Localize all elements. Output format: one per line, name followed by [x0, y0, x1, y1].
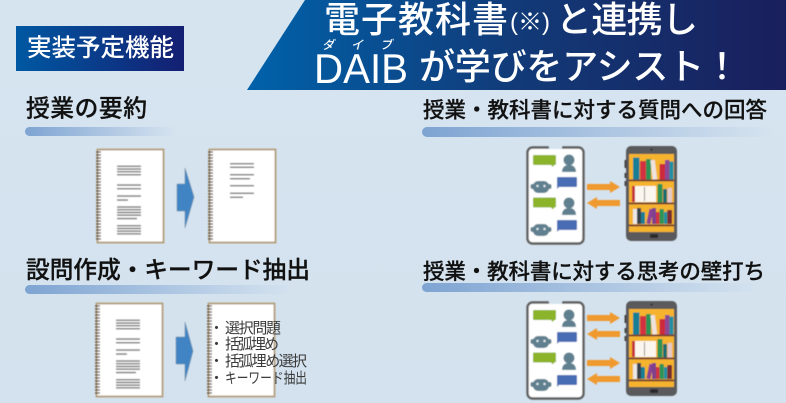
arrow: from bookshelf	[587, 197, 620, 209]
arrow: to bookshelf	[587, 181, 620, 193]
icon: result notebook	[207, 304, 274, 396]
list of question types: ・	[209, 353, 224, 370]
list of question types: 選択問題	[225, 320, 281, 337]
list of question types: ・	[209, 320, 224, 337]
list of question types: ・	[209, 336, 224, 353]
heading: lecture summary	[25, 96, 175, 136]
title line 1: link: と連携し	[556, 0, 698, 40]
icon: chat phone	[528, 300, 584, 398]
icon: bookshelf phone	[624, 301, 677, 396]
label: planned features: 実装予定機能	[27, 34, 174, 62]
title ruby: ダイブ	[322, 38, 394, 52]
icon: source notebook	[95, 304, 162, 396]
arrow: to bookshelf 1	[587, 312, 620, 324]
panel: summary illustration	[96, 150, 276, 242]
icon: bookshelf phone	[624, 146, 677, 241]
arrow: to bookshelf 2	[587, 357, 620, 369]
heading: sounding board: 授業・教科書に対する思考の壁打ち	[423, 260, 765, 284]
title line 2: DAIB: DAIB	[314, 45, 408, 92]
list of question types: 括弧埋め	[225, 336, 279, 353]
list of question types	[209, 320, 307, 387]
title line 2 continued: が学びをアシスト！	[419, 46, 740, 87]
arrow: question creation	[176, 322, 193, 381]
list of question types: 括弧埋め選択	[225, 353, 307, 370]
list of question types: キーワード抽出	[225, 370, 307, 387]
panel: sounding board illustration	[528, 300, 677, 398]
list of question types: ・	[209, 370, 224, 387]
title line 1: textbook: 電子教科書	[324, 0, 508, 40]
panel: Q and A illustration	[528, 145, 677, 244]
title line 1: note mark: (※)	[510, 9, 550, 36]
title banner	[247, 0, 786, 92]
heading: question creation and keywords: 設問作成・キーワード抽出	[26, 257, 310, 284]
heading: lecture summary: 授業の要約	[26, 96, 147, 122]
heading: questions answering	[422, 98, 772, 137]
arrow: from bookshelf 1	[587, 328, 620, 340]
icon: chat phone	[528, 145, 584, 244]
icon: summarized notebook	[208, 150, 276, 242]
heading: questions answering: 授業・教科書に対する質問への回答	[423, 98, 767, 122]
icon: full notebook	[96, 150, 164, 242]
arrow: summary	[177, 168, 194, 228]
arrow: from bookshelf 2	[587, 373, 620, 385]
panel: question creation illustration	[95, 304, 307, 396]
label: planned features	[16, 26, 184, 71]
